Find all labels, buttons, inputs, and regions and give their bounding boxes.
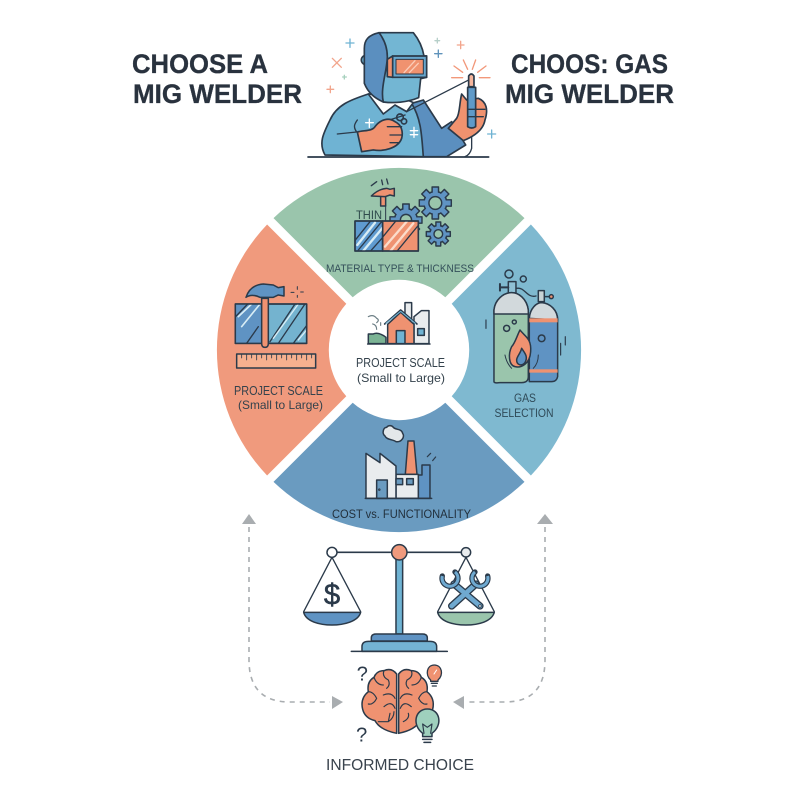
question marks: ? (357, 664, 368, 686)
scale base (371, 634, 427, 641)
left pan with dollar (304, 557, 361, 625)
label: cost vs functionality: COST vs. FUNCTIONALITY (332, 509, 471, 521)
scale pivots (327, 547, 337, 557)
label: project scale, center: (Small to Large) (357, 371, 445, 385)
title: left heading (132, 49, 302, 109)
label: gas selection (494, 393, 554, 420)
brain (362, 670, 397, 733)
icon: brain with light bulbs and question marks (356, 664, 441, 747)
sparkle marks (327, 38, 496, 138)
title: left heading: CHOOSE A (132, 49, 268, 79)
scale beam (337, 550, 462, 555)
sparks (452, 60, 490, 78)
torch handle (468, 87, 476, 128)
title: right heading: CHOOS: GAS (511, 49, 668, 79)
label: material type and thickness: MATERIAL TYPE & THICKNESS (326, 263, 474, 275)
label: project scale, left segment: PROJECT SCALE (234, 384, 323, 398)
scale column (396, 557, 403, 634)
sparkles on shirt (366, 119, 418, 137)
torch hose (407, 79, 472, 157)
icon: house with factory (368, 303, 430, 344)
icon: factory (365, 426, 436, 498)
label: gas selection: SELECTION (494, 408, 554, 420)
panel: cost vs functionality (274, 403, 524, 532)
panel: project scale, left segment (217, 224, 346, 476)
title: right heading: MIG WELDER (505, 79, 674, 109)
label: project scale, center: PROJECT SCALE (356, 356, 445, 370)
panel: project scale, center circle (333, 284, 465, 416)
chart: decision wheel (217, 168, 581, 532)
left pan with dollar: $ (324, 579, 340, 612)
helmet visor (393, 56, 427, 77)
label: project scale, center (356, 356, 445, 385)
title: left heading: MIG WELDER (133, 79, 302, 109)
icon: hammer on plate and ruler (234, 284, 316, 368)
panel: material type and thickness (274, 168, 524, 297)
bulb, orange (427, 665, 441, 686)
icon: hammer, plates and gears (354, 179, 451, 252)
label: gas selection: GAS (514, 393, 536, 405)
arrow: right dashed loop from wheel to brain (453, 514, 553, 709)
label: informed choice: INFORMED CHOICE (326, 757, 474, 774)
label: project scale, left segment (234, 384, 323, 412)
helmet ear knob (361, 55, 371, 65)
icon: balance scale, cost and functionality (304, 545, 494, 651)
welder right sleeve (412, 100, 466, 157)
welder left hand and electrode (337, 115, 405, 134)
helmet front (379, 33, 427, 103)
panel: gas selection (452, 224, 581, 476)
icon: gas cylinders (486, 270, 565, 383)
icon: welder with helmet and torch (308, 33, 496, 157)
label: thin: THIN (356, 210, 382, 222)
welder body (322, 94, 423, 157)
welder collar (368, 94, 413, 114)
workbench line (308, 154, 489, 159)
icon: brain with light bulbs and question marks: ? (356, 725, 367, 747)
right pan with wrenches (438, 557, 494, 625)
arrow: left dashed loop from wheel to brain (242, 514, 343, 709)
title: right heading (505, 49, 674, 109)
bulb, green (416, 709, 439, 742)
torch hand (448, 94, 487, 141)
helmet back (364, 33, 400, 102)
label: project scale, left segment: (Small to Large) (238, 398, 323, 412)
